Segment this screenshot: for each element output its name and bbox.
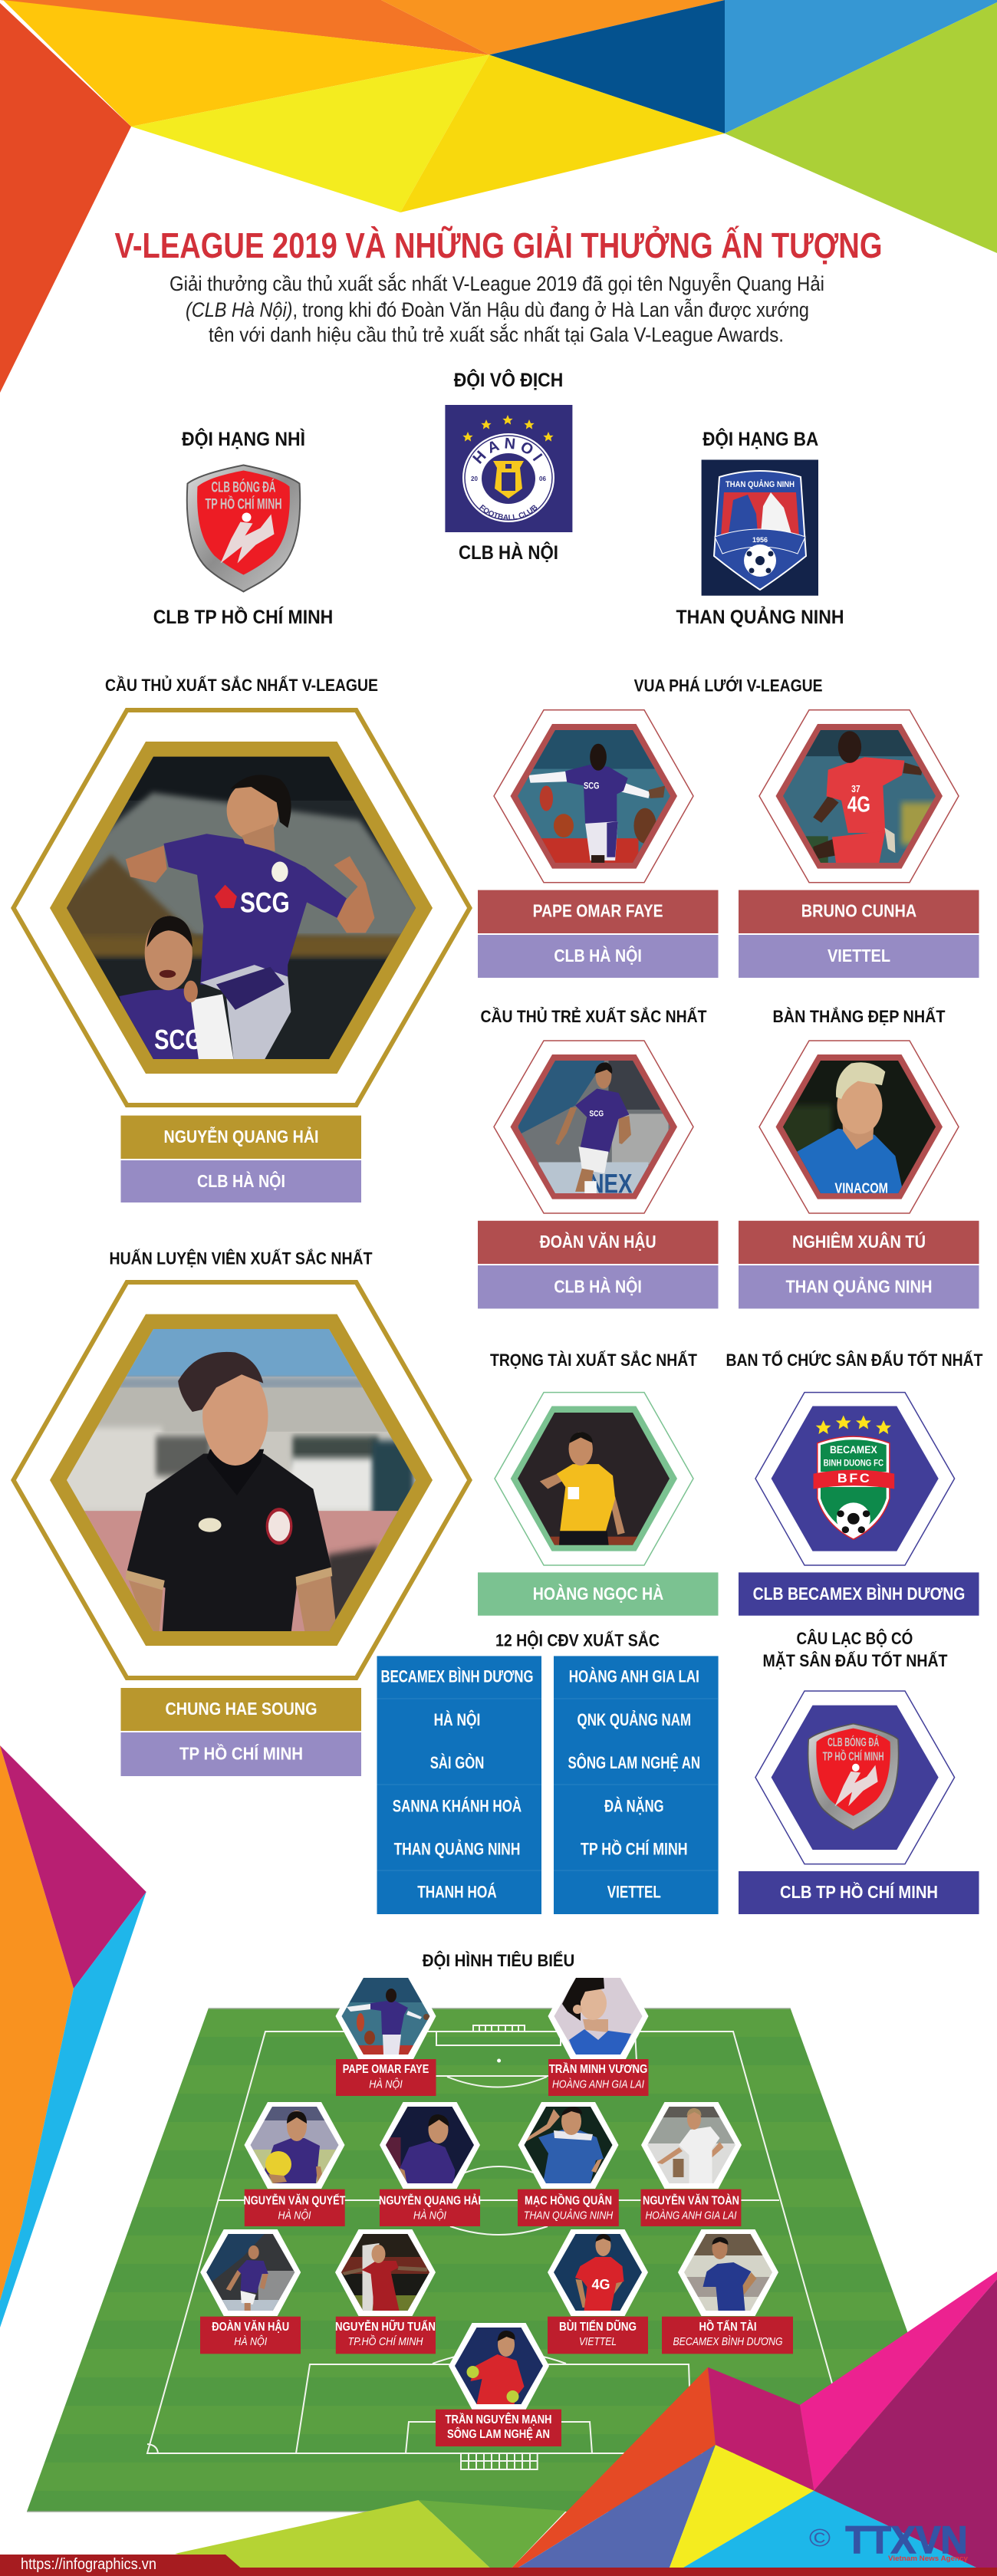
photo: Chung Hae Soung [61,1326,423,1634]
player: Doan Van Hau: HÀ NỘI [234,2335,267,2348]
player: Ho Tan Tai [662,2229,793,2354]
logo: CLB TP Ho Chi Minh [187,465,300,592]
logo: Ha Noi FC: 06 [539,475,546,482]
bottom decorative polygons [175,2272,997,2568]
fan list: column 1: HÀ NỘI [434,1710,480,1729]
panel: best young player [478,1007,718,1308]
player: Nguyen Quang Hai: HÀ NỘI [413,2209,446,2222]
name bar: CLB TP Ho Chi Minh: CLB TP HỒ CHÍ MINH [780,1881,938,1902]
footer bar: https://infographics.vn [21,2556,156,2573]
name bar: Chung Hae Soung: CHUNG HAE SOUNG [166,1699,318,1719]
left decorative polygons [0,1745,146,2328]
photo: Nguyen Quang Hai: SCG [240,887,290,919]
logo: Than Quang Ninh [702,460,818,596]
player: Tran Minh Vuong: HOÀNG ANH GIA LAI [552,2078,644,2091]
logo: TTXVN copyright: Vietnam News Agency [888,2555,968,2562]
panel: top scorer [478,676,979,978]
logo: CLB TP Ho Chi Minh: CLB BÓNG ĐÁ [828,1735,879,1749]
panel: runner-up team [153,427,333,628]
name bar: CLB Becamex Binh Duong [739,1572,979,1616]
hexagon frame: best pitch [755,1691,955,1864]
player: Nguyen Van Toan [641,2102,742,2226]
heading: third place: ĐỘI HẠNG BA [703,427,818,450]
logo: CLB TP Ho Chi Minh: TP HỒ CHÍ MINH [823,1749,884,1764]
fan list: column 1: SANNA KHÁNH HOÀ [393,1796,522,1815]
panel: best referee [478,1351,718,1616]
player: Tran Nguyen Manh: SÔNG LAM NGHỆ AN [447,2427,550,2441]
player: Tran Minh Vuong: TRẦN MINH VƯƠNG [549,2063,647,2076]
photo: Bruno Cunha [783,730,936,863]
second player [119,989,203,1061]
intro text: (CLB Hà Nội), trong khi đó Đoàn Văn Hậu dù đang ở Hà Lan vẫn được xướng [186,298,809,321]
logo: TTXVN copyright: © [809,2524,831,2551]
fan list: column 2: SÔNG LAM NGHỆ AN [568,1753,700,1772]
club bar: CLB Ha Noi [121,1160,361,1202]
fan list: column 1: THAN QUẢNG NINH [394,1839,520,1859]
hexagon frame: Pape Omar Faye [494,710,693,883]
hexagon frame: Hoang Ngoc Ha [495,1393,693,1565]
team name: CLB Ha Noi: CLB HÀ NỘI [459,541,558,564]
intro text [169,271,824,347]
name bar: Nguyen Quang Hai: NGUYỄN QUANG HẢI [164,1125,319,1147]
player: Nguyen Huu Tuan [335,2229,436,2354]
club bar: TP Ho Chi Minh: TP HỒ CHÍ MINH [179,1742,303,1764]
photo: Nguyen Quang Hai: SCG [154,1025,202,1055]
hexagon frame: Doan Van Hau [494,1041,693,1213]
panel: best organiser [726,1350,983,1616]
player: Doan Van Hau: ĐOÀN VĂN HẬU [212,2320,289,2334]
club bar: CLB Ha Noi [478,935,718,978]
name bar: Hoang Ngoc Ha [478,1572,718,1616]
hexagon frame: best player [14,710,469,1105]
heading: top scorer: VUA PHÁ LƯỚI V-LEAGUE [634,676,823,696]
main player [126,846,167,883]
name bar: Bruno Cunha [739,890,979,933]
player: Tran Nguyen Manh [436,2323,561,2446]
name bar: Hoang Ngoc Ha: HOÀNG NGỌC HÀ [533,1583,663,1604]
player: Nguyen Van Quyet: NGUYỄN VĂN QUYẾT [244,2194,346,2207]
team name: CLB TP Ho Chi Minh: CLB TP HỒ CHÍ MINH [153,605,333,628]
player: Tran Nguyen Manh: TRẦN NGUYÊN MẠNH [445,2413,552,2426]
logo: Than Quang Ninh: 1956 [752,536,768,544]
player: Nguyen Huu Tuan: TP.HỒ CHÍ MINH [348,2334,423,2348]
logo: CLB TP Ho Chi Minh: TP HỒ CHÍ MINH [206,495,281,512]
club bar: CLB Ha Noi: CLB HÀ NỘI [554,945,642,966]
player: Ho Tan Tai: HỒ TẤN TÀI [699,2320,756,2334]
photo: Bruno Cunha: 37 [851,783,860,795]
player: Nguyen Huu Tuan: NGUYỄN HỮU TUẤN [335,2320,436,2334]
panel: best pitch [739,1629,979,1914]
photo: Nguyen Quang Hai [61,750,423,1067]
player: Nguyen Quang Hai: NGUYỄN QUANG HẢI [379,2194,481,2207]
club bar: CLB Ha Noi: CLB HÀ NỘI [554,1276,642,1296]
name bar: CLB TP Ho Chi Minh [739,1871,979,1914]
player: Ho Tan Tai: BECAMEX BÌNH DƯƠNG [673,2335,782,2348]
panel: third place team [676,427,844,628]
photo: Pape Omar Faye: SCG [584,781,600,791]
heading: best pitch: MẶT SÂN ĐẤU TỐT NHẤT [762,1650,948,1670]
team name: Than Quang Ninh: THAN QUẢNG NINH [676,605,844,628]
club bar: CLB Ha Noi [478,1265,718,1308]
photo: Doan Van Hau: NEX [588,1168,633,1199]
name bar: Nguyen Quang Hai [121,1116,361,1159]
heading: best referee: TRỌNG TÀI XUẤT SẮC NHẤT [490,1351,697,1370]
fan list: column 2: HOÀNG ANH GIA LAI [569,1667,699,1686]
logo: Than Quang Ninh: THAN QUẢNG NINH [726,479,795,489]
player: Mac Hong Quan: THAN QUẢNG NINH [524,2208,614,2222]
name bar: Chung Hae Soung [121,1688,361,1731]
fan list: column 1: THANH HOÁ [417,1883,497,1902]
heading: best player: CẦU THỦ XUẤT SẮC NHẤT V-LEAGUE [105,676,378,695]
hexagon frame: Nghiem Xuan Tu [759,1041,959,1213]
heading: team of the season: ĐỘI HÌNH TIÊU BIỂU [423,1951,574,1970]
fan list: column 2: TP HỒ CHÍ MINH [581,1839,688,1859]
player: Nguyen Van Toan: NGUYỄN VĂN TOÀN [643,2194,739,2207]
intro text: Giải thưởng cầu thủ xuất sắc nhất V-League 2019 đã gọi tên Nguyễn Quang Hải [169,271,824,295]
panel: best goal [739,1007,979,1308]
panel: best player [14,676,469,1202]
name bar: Doan Van Hau [478,1221,718,1264]
player: Bui Tien Dung: VIETTEL [579,2336,617,2348]
name bar: Doan Van Hau: ĐOÀN VĂN HẬU [540,1231,656,1252]
heading: champion: ĐỘI VÔ ĐỊCH [454,368,563,391]
heading: best coach: HUẤN LUYỆN VIÊN XUẤT SẮC NHẤT [109,1249,373,1268]
fan list: column 2 [554,1656,719,1914]
logo: Becamex Binh Duong: BINH DUONG FC [824,1458,883,1469]
fan list: column 2: VIETTEL [607,1883,661,1902]
heading: best goal: BÀN THẮNG ĐẸP NHẤT [773,1007,946,1026]
panel: best fans [377,1630,719,1914]
logo: Becamex Binh Duong: BFC [837,1470,870,1485]
heading: best young player: CẦU THỦ TRẺ XUẤT SẮC NHẤT [480,1007,707,1026]
panel: best coach [14,1249,469,1776]
logo: CLB TP Ho Chi Minh: CLB BÓNG ĐÁ [212,479,276,495]
player: Pape Omar Faye: HÀ NỘI [369,2078,403,2091]
photo: Bruno Cunha: 4G [847,793,870,817]
coach figure [127,1454,331,1634]
heading: runner-up: ĐỘI HẠNG NHÌ [182,427,305,450]
name bar: CLB Becamex Binh Duong: CLB BECAMEX BÌNH DƯƠNG [753,1583,965,1604]
logo: Ha Noi FC [445,405,572,532]
fan list: column 2: ĐÀ NẶNG [604,1796,664,1815]
club bar: CLB Ha Noi: CLB HÀ NỘI [197,1170,285,1191]
player: Bui Tien Dung [548,2229,648,2354]
name bar: Nghiem Xuan Tu [739,1221,979,1264]
player: Nguyen Van Quyet [244,2102,346,2226]
logo: Ha Noi FC: FOOTBALL CLUB [479,505,537,520]
name bar: Pape Omar Faye: PAPE OMAR FAYE [533,901,663,921]
player: Mac Hong Quan [518,2102,619,2226]
panel: lineup players [200,1974,793,2446]
club bar: Viettel: VIETTEL [828,946,890,966]
heading: best pitch [762,1629,948,1670]
logo: Becamex Binh Duong [814,1415,894,1539]
top decorative polygons [0,0,997,393]
name bar: Bruno Cunha: BRUNO CUNHA [801,901,916,921]
player: Nguyen Quang Hai [379,2102,481,2226]
heading: best pitch: CÂU LẠC BỘ CÓ [797,1629,913,1648]
photo: Nghiem Xuan Tu: VINACOM [834,1180,888,1196]
club bar: Viettel [739,935,979,978]
heading: best fans: 12 HỘI CĐV XUẤT SẮC [495,1630,660,1650]
logo: CLB TP Ho Chi Minh [808,1724,899,1830]
club bar: Than Quang Ninh [739,1265,979,1308]
fan list: column 1 [377,1656,541,1914]
name bar: Nghiem Xuan Tu: NGHIÊM XUÂN TÚ [792,1231,926,1252]
hexagon frame: best coach [14,1282,469,1678]
panel: champion team [445,368,572,564]
player: Nguyen Van Toan: HOÀNG ANH GIA LAI [646,2209,736,2222]
logo: Ha Noi FC: 20 [471,475,478,482]
player: Mac Hong Quan: MẠC HỒNG QUÂN [525,2193,612,2207]
photo: Doan Van Hau [518,1061,670,1193]
intro text: tên với danh hiệu cầu thủ trẻ xuất sắc nhất tại Gala V-League Awards. [209,322,784,347]
logo: TTXVN copyright: TTXVN [845,2518,968,2561]
footer bar [0,2555,997,2576]
photo: Nghiem Xuan Tu [783,1061,936,1193]
photo: Doan Van Hau: SCG [589,1110,604,1119]
player: Bui Tien Dung: BÙI TIẾN DŨNG [559,2320,637,2334]
name bar: Pape Omar Faye [478,890,718,933]
player: Pape Omar Faye: PAPE OMAR FAYE [343,2063,429,2076]
photo: Pape Omar Faye [515,727,675,866]
fan list: column 2: QNK QUẢNG NAM [577,1710,691,1729]
club bar: TP Ho Chi Minh [121,1732,361,1776]
player: Pape Omar Faye [336,1974,436,2096]
football pitch [27,2008,972,2512]
club bar: Than Quang Ninh: THAN QUẢNG NINH [785,1275,933,1296]
logo: Becamex Binh Duong: BECAMEX [830,1445,877,1456]
logo: Ha Noi FC: HANOI [472,437,543,464]
photo: Hoang Ngoc Ha [512,1411,673,1548]
player: Doan Van Hau [200,2229,301,2354]
player: Bui Tien Dung: 4G [592,2277,610,2292]
hexagon frame: Becamex [755,1393,955,1565]
player: Nguyen Van Quyet: HÀ NỘI [278,2209,311,2222]
hexagon frame: Bruno Cunha [759,710,959,883]
fan list: column 1: SÀI GÒN [430,1753,484,1772]
player: Tran Minh Vuong [548,1974,649,2096]
fan list: column 1: BECAMEX BÌNH DƯƠNG [380,1667,534,1686]
